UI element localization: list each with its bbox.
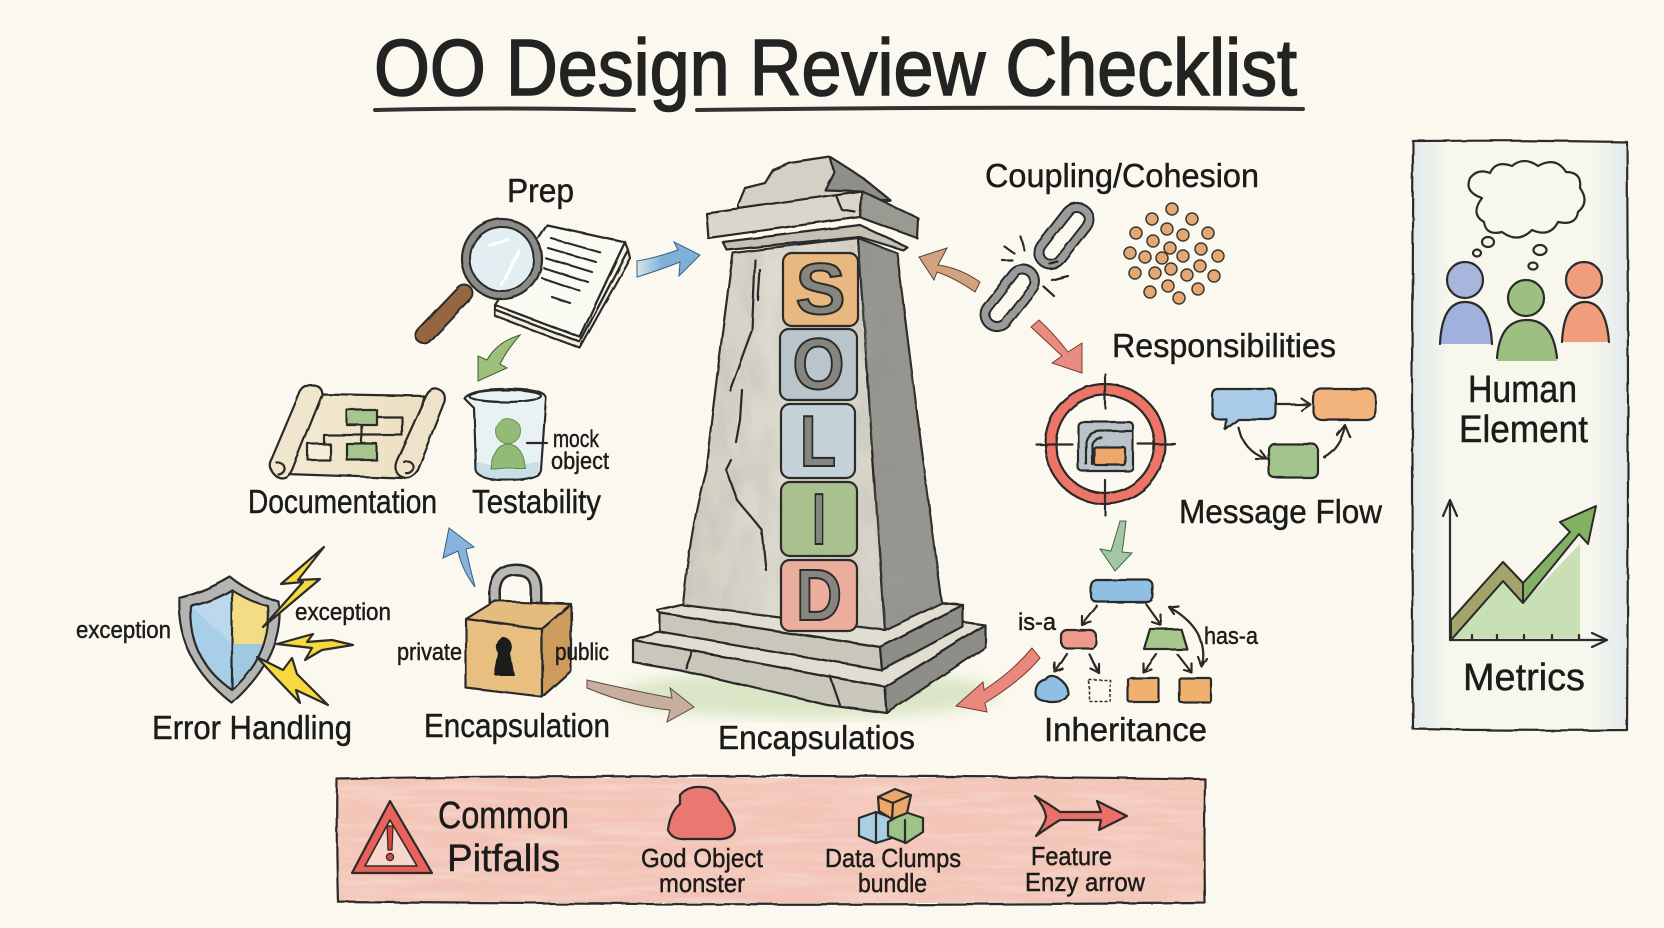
label: Human Element: Human bbox=[1468, 369, 1577, 411]
arrow: Prep to pillar bbox=[637, 242, 700, 277]
label: Inheritance: Inheritance bbox=[1044, 711, 1207, 748]
label: mock object bbox=[551, 426, 609, 475]
panel: Human Element and Metrics bbox=[1412, 141, 1628, 730]
SOLID pillar bbox=[620, 157, 1000, 756]
label: Testability: Testability bbox=[472, 483, 601, 520]
block: L: L bbox=[800, 402, 836, 482]
block: D bbox=[781, 556, 857, 636]
arrow: Encapsulation to pillar bbox=[587, 680, 694, 722]
label: Data Clumps bundle bbox=[825, 843, 961, 898]
icon: shield bbox=[179, 577, 280, 703]
panel: Common Pitfalls bbox=[337, 776, 1205, 904]
label: private: private bbox=[397, 639, 462, 666]
label: has-a: has-a bbox=[1204, 623, 1259, 650]
arrow: Prep to Testability bbox=[478, 335, 520, 381]
icon: Feature Envy arrow bbox=[1035, 796, 1127, 836]
arrow: Coupling to pillar bbox=[919, 248, 980, 292]
block: I bbox=[781, 480, 857, 560]
label: Encapsulation: Encapsulation bbox=[424, 707, 610, 744]
arrow: Encapsulation to Testability bbox=[443, 528, 475, 587]
grass bbox=[620, 670, 1000, 718]
arrow: Coupling to Responsibilities bbox=[1031, 320, 1082, 373]
panel fill and frame bbox=[337, 776, 1205, 904]
SOLID letter blocks bbox=[780, 250, 858, 636]
section: Responsibilities bbox=[1036, 327, 1336, 515]
icon: God Object monster bbox=[668, 787, 735, 839]
section: Error Handling bbox=[76, 547, 391, 746]
icon: Data Clumps cubes bbox=[859, 789, 923, 843]
label: Documentation: Documentation bbox=[248, 483, 437, 520]
label: mock object: mock bbox=[553, 426, 600, 453]
diagram: class hierarchy bbox=[1036, 580, 1211, 702]
label: Encapsulatios: Encapsulatios bbox=[718, 719, 915, 756]
label: God Object monster: God Object bbox=[641, 843, 764, 873]
section: Coupling/Cohesion bbox=[980, 157, 1259, 331]
title: OO Design Review Checklist bbox=[374, 23, 1297, 112]
label: public: public bbox=[555, 639, 609, 666]
block: D: D bbox=[796, 556, 842, 636]
icon: broken chain bbox=[980, 203, 1094, 331]
icon: beaker with mock object bbox=[464, 389, 547, 480]
section: Message Flow bbox=[1179, 389, 1382, 530]
icon: padlock bbox=[466, 570, 571, 697]
arrow: Responsibilities to Inheritance bbox=[1100, 521, 1132, 571]
block: O: O bbox=[792, 325, 844, 405]
label: Error Handling: Error Handling bbox=[152, 709, 352, 746]
icon: people with thought cloud bbox=[1440, 161, 1609, 361]
label: God Object monster bbox=[641, 843, 764, 898]
block: L bbox=[781, 402, 855, 482]
heading: Responsibilities: Responsibilities bbox=[1112, 327, 1336, 364]
section: Prep bbox=[424, 172, 630, 348]
block: I: I bbox=[812, 480, 826, 560]
section: Testability bbox=[464, 389, 609, 520]
block: S bbox=[783, 250, 858, 330]
heading: Prep: Prep bbox=[507, 172, 574, 209]
label: Data Clumps bundle: Data Clumps bbox=[825, 843, 961, 873]
section: Documentation bbox=[248, 385, 445, 520]
block: S: S bbox=[796, 250, 846, 330]
icon: papers and magnifier bbox=[424, 219, 630, 348]
label: Data Clumps bundle: bundle bbox=[858, 868, 927, 898]
arrow: Inheritance to pillar bbox=[956, 648, 1040, 712]
icon: lightning bolts bbox=[257, 547, 353, 705]
label: Human Element: Element bbox=[1459, 409, 1588, 451]
icon: blueprint scroll bbox=[270, 385, 445, 478]
label: Feature Enzy arrow: Enzy arrow bbox=[1025, 867, 1145, 897]
label: Feature Enzy arrow bbox=[1025, 841, 1145, 897]
section: Inheritance bbox=[1018, 580, 1259, 748]
heading: Common Pitfalls: Common bbox=[438, 795, 569, 837]
label: is-a: is-a bbox=[1018, 609, 1057, 636]
label: Message Flow: Message Flow bbox=[1179, 493, 1382, 530]
section: Encapsulation lock bbox=[397, 570, 610, 744]
icon: cohesion dot cluster bbox=[1124, 203, 1224, 304]
label: Human Element bbox=[1459, 369, 1588, 451]
label: exception right: exception bbox=[295, 599, 391, 626]
icon: warning triangle bbox=[352, 801, 432, 873]
icon: message flow diagram bbox=[1212, 389, 1376, 478]
label: God Object monster: monster bbox=[659, 868, 745, 898]
heading: Common Pitfalls: Pitfalls bbox=[447, 838, 560, 880]
label: Metrics: Metrics bbox=[1463, 657, 1585, 699]
heading: Common Pitfalls bbox=[438, 795, 569, 880]
label: exception left: exception bbox=[76, 617, 171, 644]
chart: metrics rising arrow bbox=[1443, 500, 1607, 647]
heading: Coupling/Cohesion: Coupling/Cohesion bbox=[985, 157, 1259, 194]
label: mock object: object bbox=[551, 448, 609, 475]
icon: target with class window bbox=[1036, 374, 1175, 515]
stone pillar body bbox=[633, 157, 985, 713]
label: Feature Enzy arrow: Feature bbox=[1031, 841, 1112, 871]
panel frame bbox=[1412, 141, 1628, 730]
